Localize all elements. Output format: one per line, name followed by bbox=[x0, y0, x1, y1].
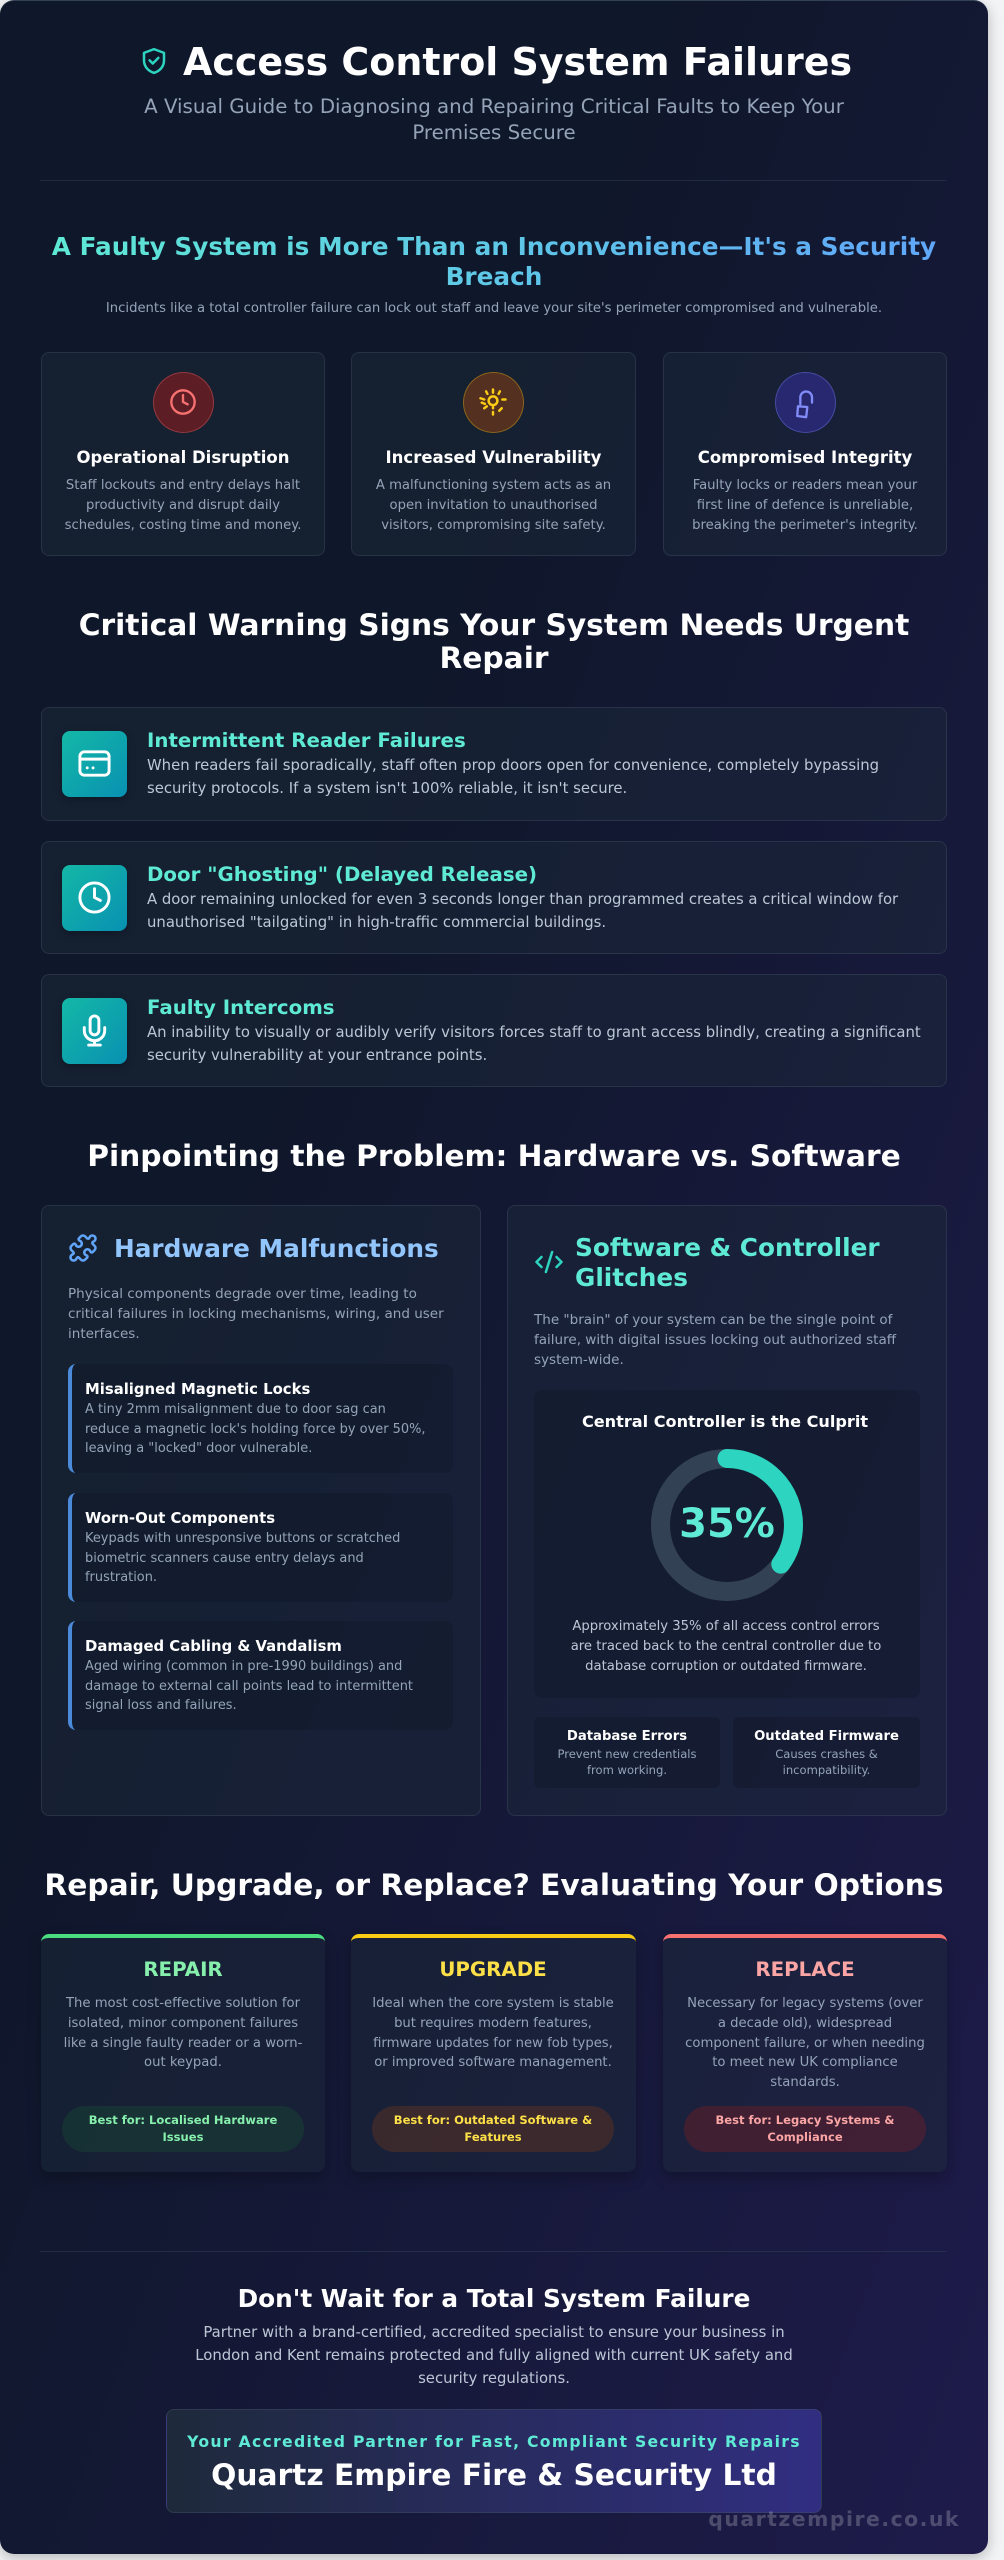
card text: breaking the perimeter's integrity. bbox=[692, 518, 918, 533]
icon: card reader bbox=[62, 731, 127, 797]
panel: door ghosting bbox=[41, 841, 947, 954]
icon: microphone bbox=[62, 998, 127, 1064]
row text: security vulnerability at your entrance points. bbox=[147, 1046, 487, 1064]
row title: Faulty Intercoms bbox=[147, 996, 335, 1019]
subtitle: A Visual Guide to Diagnosing and Repairing Critical Faults to Keep Your bbox=[144, 95, 844, 118]
icon: puzzle bbox=[69, 1234, 97, 1262]
option card: replace bbox=[663, 1934, 947, 2172]
best for badge: Compliance bbox=[767, 2130, 843, 2144]
watermark website: quartzempire.co.uk bbox=[708, 2507, 960, 2531]
icon: code bbox=[535, 1250, 563, 1274]
option text: but requires modern features, bbox=[394, 2016, 592, 2031]
best for badge: Best for: Legacy Systems & bbox=[715, 2113, 895, 2127]
icon: clock bbox=[62, 865, 127, 931]
option text bbox=[372, 1996, 614, 2070]
card text bbox=[65, 478, 301, 533]
heading: security breach: A Faulty System is More Than an Inconvenience—It's a Security bbox=[52, 232, 936, 261]
stat text: incompatibility. bbox=[783, 1763, 870, 1777]
chart caption: are traced back to the central controller due to bbox=[571, 1639, 881, 1654]
option card: upgrade bbox=[351, 1934, 636, 2172]
chart caption: database corruption or outdated firmware. bbox=[585, 1659, 867, 1674]
option text: firmware updates for new fob types, bbox=[373, 2036, 613, 2051]
item text: A tiny 2mm misalignment due to door sag can bbox=[85, 1402, 386, 1417]
heading: security breach: Breach bbox=[446, 262, 542, 291]
option title: REPLACE bbox=[755, 1958, 855, 1981]
panel intro bbox=[534, 1312, 896, 1368]
card title: Compromised Integrity bbox=[698, 448, 912, 467]
option title: UPGRADE bbox=[439, 1958, 547, 1981]
panel: compromised integrity bbox=[663, 352, 947, 556]
panel intro: Physical components degrade over time, leading to bbox=[68, 1286, 417, 1302]
best for badge: Best for: Outdated Software & bbox=[394, 2113, 592, 2127]
item: damaged cabling bbox=[68, 1621, 453, 1730]
panel: hardware malfunctions bbox=[41, 1205, 481, 1816]
best for badge bbox=[62, 2106, 304, 2152]
option card: repair bbox=[41, 1934, 325, 2172]
row text: An inability to visually or audibly verify visitors forces staff to grant access blindly, creating a significant bbox=[147, 1023, 921, 1041]
row text: When readers fail sporadically, staff often prop doors open for convenience, completely bypassing bbox=[147, 756, 879, 774]
panel heading: Software & Controller bbox=[575, 1233, 880, 1262]
heading: hardware vs software: Pinpointing the Problem: Hardware vs. Software bbox=[87, 1139, 901, 1174]
item text: leaving a "locked" door vulnerable. bbox=[85, 1441, 312, 1456]
option text: isolated, minor component failures bbox=[68, 2016, 298, 2031]
intro text: Incidents like a total controller failure can lock out staff and leave your site's perimeter compromised and vulnerable. bbox=[106, 301, 882, 316]
option text: or improved software management. bbox=[374, 2055, 612, 2070]
item text: signal loss and failures. bbox=[85, 1698, 237, 1713]
item text: frustration. bbox=[85, 1570, 157, 1585]
stat text: from working. bbox=[587, 1763, 667, 1777]
item text: biometric scanners cause entry delays and bbox=[85, 1551, 364, 1566]
item title: Misaligned Magnetic Locks bbox=[85, 1380, 310, 1398]
best for badge bbox=[684, 2106, 926, 2152]
stat text bbox=[775, 1747, 878, 1777]
item text: reduce a magnetic lock's holding force by over 50%, bbox=[85, 1422, 426, 1437]
call to action text: security regulations. bbox=[418, 2369, 570, 2387]
best for badge: Best for: Localised Hardware bbox=[89, 2113, 277, 2127]
item: worn-out components bbox=[68, 1493, 453, 1602]
row text: unauthorised "tailgating" in high-traffic commercial buildings. bbox=[147, 913, 606, 931]
panel heading: Glitches bbox=[575, 1263, 688, 1292]
panel intro bbox=[68, 1286, 444, 1342]
item text: Aged wiring (common in pre-1990 buildings) and bbox=[85, 1659, 402, 1674]
item text bbox=[85, 1659, 413, 1713]
icon: shield check bbox=[142, 48, 166, 74]
option text: component failure, or when needing bbox=[685, 2036, 925, 2051]
option text: to meet new UK compliance bbox=[712, 2055, 898, 2070]
item title: Worn-Out Components bbox=[85, 1509, 275, 1527]
option text: The most cost-effective solution for bbox=[66, 1996, 300, 2011]
title with shield icon bbox=[142, 40, 852, 84]
card text bbox=[692, 478, 918, 533]
row text bbox=[147, 890, 898, 931]
item text bbox=[85, 1531, 400, 1585]
card text: Faulty locks or readers mean your bbox=[693, 478, 917, 493]
card title: Increased Vulnerability bbox=[386, 448, 601, 467]
stat box: outdated firmware bbox=[733, 1717, 920, 1788]
best for badge: Issues bbox=[163, 2130, 203, 2144]
item text: damage to external call points lead to intermittent bbox=[85, 1679, 413, 1694]
option text: a decade old), widespread bbox=[718, 2016, 892, 2031]
stat title: Outdated Firmware bbox=[754, 1729, 899, 1744]
row text bbox=[147, 1023, 921, 1064]
item title: Damaged Cabling & Vandalism bbox=[85, 1637, 342, 1655]
panel intro: The "brain" of your system can be the single point of bbox=[534, 1312, 892, 1328]
item: magnetic locks bbox=[68, 1364, 453, 1473]
company banner bbox=[166, 2409, 822, 2513]
row title: Door "Ghosting" (Delayed Release) bbox=[147, 863, 537, 886]
stat box: database errors bbox=[534, 1717, 720, 1788]
call to action text: London and Kent remains protected and fully aligned with current UK safety and bbox=[195, 2346, 793, 2364]
option text bbox=[685, 1996, 925, 2090]
heading: warning signs: Repair bbox=[439, 641, 549, 676]
item text bbox=[85, 1402, 426, 1456]
stat text: Prevent new credentials bbox=[557, 1747, 697, 1761]
call to action text bbox=[195, 2323, 793, 2387]
panel: software and controller glitches bbox=[507, 1205, 947, 1816]
row text: A door remaining unlocked for even 3 seconds longer than programmed creates a critical window for bbox=[147, 890, 898, 908]
main title text: Access Control System Failures bbox=[183, 40, 852, 84]
heading: security breach bbox=[41, 232, 947, 292]
item text: Keypads with unresponsive buttons or scratched bbox=[85, 1531, 400, 1546]
call to action heading: Don't Wait for a Total System Failure bbox=[238, 2284, 750, 2313]
stat title: Database Errors bbox=[567, 1729, 687, 1744]
option text bbox=[64, 1996, 302, 2070]
company name: Quartz Empire Fire & Security Ltd bbox=[211, 2458, 777, 2493]
option title: REPAIR bbox=[143, 1958, 223, 1981]
option text: like a single faulty reader or a worn- bbox=[64, 2036, 302, 2051]
card text: Staff lockouts and entry delays halt bbox=[66, 478, 300, 493]
panel: faulty intercoms bbox=[41, 974, 947, 1087]
card text: first line of defence is unreliable, bbox=[697, 498, 913, 513]
icon: clock bbox=[153, 372, 214, 433]
subtitle: Premises Secure bbox=[412, 121, 576, 144]
donut chart 35% bbox=[651, 1449, 803, 1601]
panel intro: failure, with digital issues locking out authorized staff bbox=[534, 1332, 896, 1348]
panel heading bbox=[575, 1233, 880, 1292]
heading: warning signs: Critical Warning Signs Your System Needs Urgent bbox=[79, 608, 909, 643]
panel heading: Hardware Malfunctions bbox=[114, 1234, 439, 1263]
card text bbox=[376, 478, 611, 533]
panel intro: critical failures in locking mechanisms, wiring, and user bbox=[68, 1306, 444, 1322]
heading: evaluating options: Repair, Upgrade, or Replace? Evaluating Your Options bbox=[44, 1868, 944, 1903]
tagline: Your Accredited Partner for Fast, Compliant Security Repairs bbox=[187, 2432, 801, 2451]
panel: increased vulnerability bbox=[351, 352, 636, 556]
stat text bbox=[557, 1747, 697, 1777]
option text: out keypad. bbox=[144, 2055, 222, 2070]
panel: intermittent reader failures bbox=[41, 707, 947, 821]
row text bbox=[147, 756, 879, 797]
donut value: 35% bbox=[679, 1501, 775, 1547]
panel intro: interfaces. bbox=[68, 1326, 140, 1342]
panel intro: system-wide. bbox=[534, 1352, 624, 1368]
option text: Necessary for legacy systems (over bbox=[687, 1996, 923, 2011]
card title: Operational Disruption bbox=[77, 448, 289, 467]
row text: security protocols. If a system isn't 100% reliable, it isn't secure. bbox=[147, 779, 627, 797]
card text: visitors, compromising site safety. bbox=[381, 518, 606, 533]
card text: productivity and disrupt daily bbox=[86, 498, 280, 513]
stat text: Causes crashes & bbox=[775, 1747, 878, 1761]
call to action text: Partner with a brand-certified, accredited specialist to ensure your business in bbox=[203, 2323, 785, 2341]
heading: warning signs bbox=[79, 608, 909, 676]
best for badge: Features bbox=[464, 2130, 522, 2144]
best for badge bbox=[372, 2106, 614, 2152]
chart caption: Approximately 35% of all access control errors bbox=[572, 1619, 880, 1634]
option text: standards. bbox=[770, 2075, 840, 2090]
option text: Ideal when the core system is stable bbox=[372, 1996, 614, 2011]
card text: open invitation to unauthorised bbox=[390, 498, 597, 513]
panel: operational disruption bbox=[41, 352, 325, 556]
card text: A malfunctioning system acts as an bbox=[376, 478, 611, 493]
chart panel: central controller bbox=[534, 1390, 920, 1698]
chart title: Central Controller is the Culprit bbox=[582, 1412, 868, 1431]
subtitle bbox=[144, 95, 844, 144]
icon: lightbulb rays bbox=[463, 372, 524, 433]
chart caption bbox=[571, 1619, 881, 1674]
card text: schedules, costing time and money. bbox=[65, 518, 301, 533]
row title: Intermittent Reader Failures bbox=[147, 729, 466, 752]
icon: open lock bbox=[775, 372, 836, 433]
